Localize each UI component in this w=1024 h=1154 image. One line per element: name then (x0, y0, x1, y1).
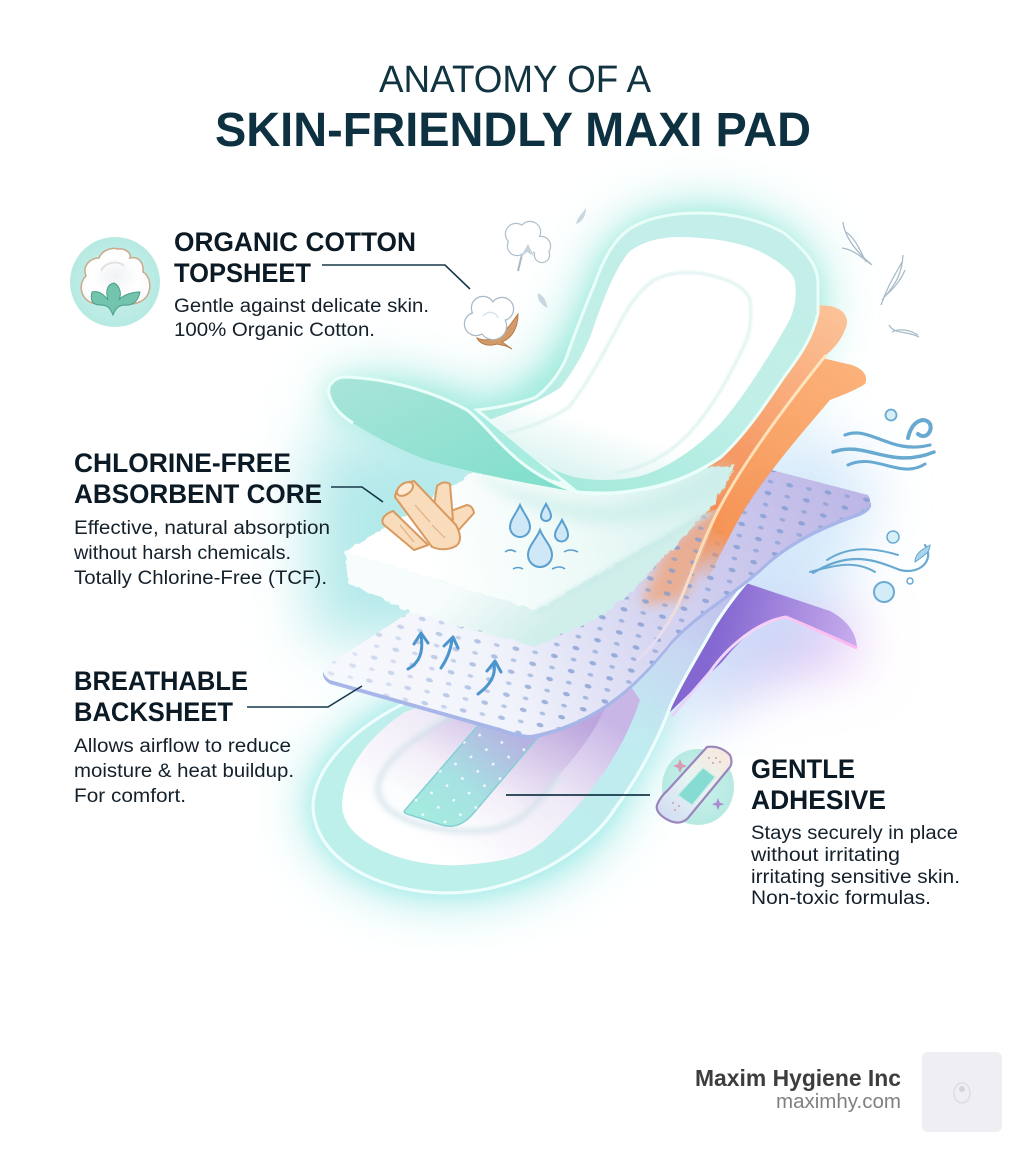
body text (74, 736, 294, 807)
airflow arrows (408, 633, 501, 694)
heading (174, 227, 416, 288)
body text: Non-toxic formulas. (751, 888, 931, 909)
white absorbent panel (489, 237, 796, 480)
footer brand: maximhy.com (776, 1091, 901, 1113)
leader line (322, 265, 470, 289)
body text: Allows airflow to reduce (74, 736, 291, 757)
adhesive strip (404, 722, 546, 826)
heading: GENTLE (751, 754, 855, 784)
icon: air swirl lower (810, 531, 930, 602)
inner groove (506, 273, 751, 473)
callout: gentle adhesive (506, 747, 960, 909)
layer: absorbent core (345, 460, 735, 647)
title: SKIN-FRIENDLY MAXI PAD (215, 104, 811, 157)
leader line (506, 794, 650, 796)
layer: breathable backsheet (323, 467, 871, 739)
heading: TOPSHEET (174, 258, 311, 288)
inner well (378, 690, 612, 831)
body text (750, 823, 960, 909)
icon: bandage (657, 747, 734, 825)
icon: floating cotton wisps (538, 208, 586, 308)
icon: cotton boll upper (506, 222, 550, 271)
callout: organic cotton topsheet (70, 227, 470, 341)
orange tint (640, 480, 735, 605)
footer brand (695, 1065, 901, 1113)
body text: without irritating (750, 845, 900, 866)
footer brand: Maxim Hygiene Inc (695, 1065, 901, 1091)
logo placeholder (922, 1052, 1002, 1132)
layer: orange liners (637, 305, 866, 660)
icon: air wisps (842, 222, 919, 337)
callout: chlorine-free absorbent core (73, 448, 383, 589)
body text: without harsh chemicals. (73, 543, 291, 564)
body text (73, 518, 330, 589)
body text: Totally Chlorine-Free (TCF). (74, 568, 327, 589)
heading: ABSORBENT CORE (74, 479, 322, 509)
layer: organic cotton topsheet (329, 213, 818, 494)
icon: water drops (505, 504, 578, 569)
body text: Effective, natural absorption (74, 518, 330, 539)
cushion (342, 640, 640, 865)
title: ANATOMY OF A (379, 59, 652, 101)
icon: wood logs (382, 479, 474, 550)
leader line (247, 686, 362, 707)
icon: water waves upper (833, 410, 934, 469)
body text: irritating sensitive skin. (751, 867, 960, 888)
heading (74, 666, 248, 727)
body text (174, 296, 429, 341)
body text: 100% Organic Cotton. (174, 320, 375, 341)
body text: For comfort. (74, 786, 186, 807)
background glow (310, 213, 880, 893)
layer: purple wing (670, 583, 857, 716)
icon: cotton boll near topsheet (465, 297, 518, 349)
icon: cotton in circle (70, 237, 160, 327)
heading (74, 448, 322, 509)
heading (751, 754, 886, 815)
heading: BREATHABLE (74, 666, 248, 696)
body text: Gentle against delicate skin. (174, 296, 429, 317)
body text: Stays securely in place (751, 823, 958, 844)
title (215, 59, 811, 157)
layer: lower pad with rim (313, 500, 868, 893)
leader line (331, 487, 383, 502)
wing flap (329, 377, 577, 492)
heading: CHLORINE-FREE (74, 448, 291, 478)
heading: BACKSHEET (74, 697, 233, 727)
heading: ORGANIC COTTON (174, 227, 416, 257)
callout: breathable backsheet (74, 666, 362, 807)
heading: ADHESIVE (751, 785, 886, 815)
body text: moisture & heat buildup. (74, 761, 294, 782)
